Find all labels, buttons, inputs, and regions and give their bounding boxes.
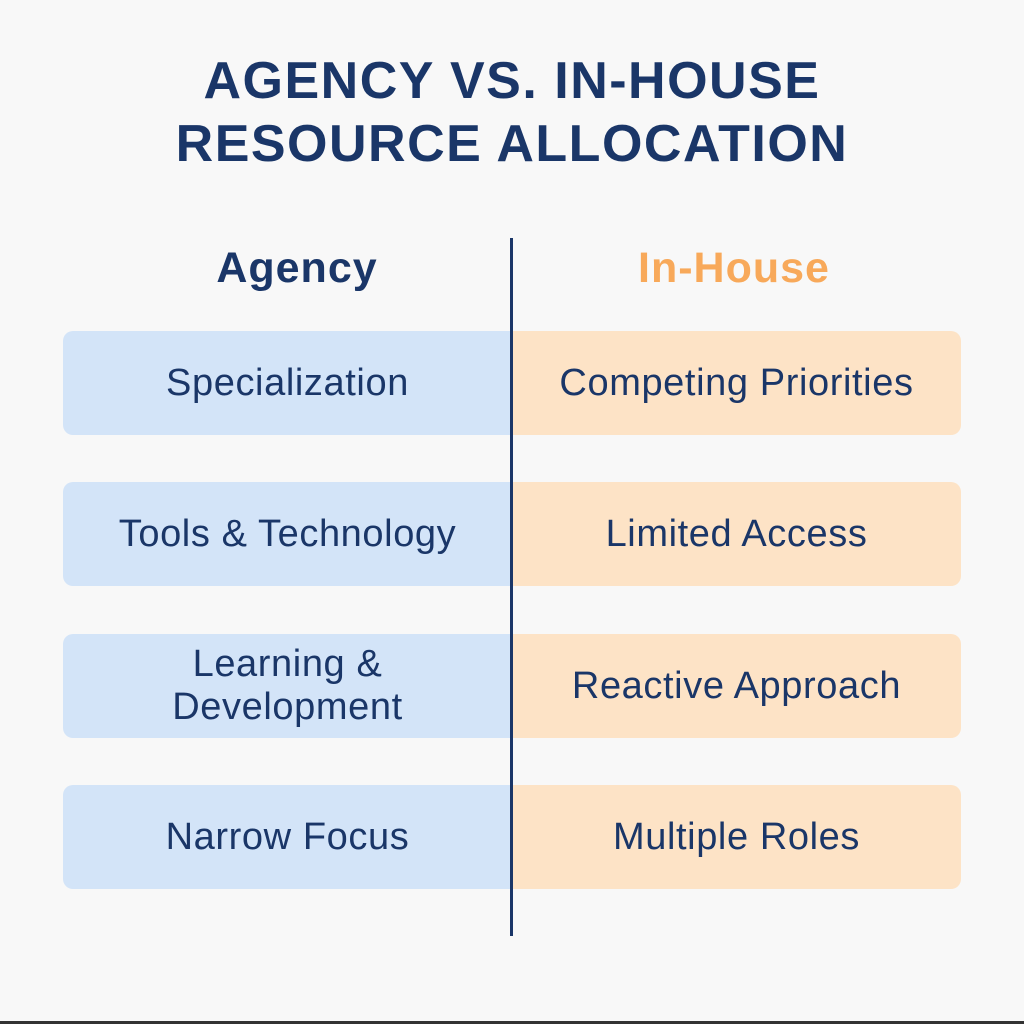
- in-house item 1: [512, 331, 961, 435]
- agency item 4: [63, 785, 512, 889]
- title: AGENCY VS. IN-HOUSE: [204, 52, 820, 110]
- in-house item 4: [512, 785, 961, 889]
- title: RESOURCE ALLOCATION: [176, 115, 848, 173]
- agency item 2: [63, 482, 512, 586]
- title: [176, 52, 848, 173]
- in-house item 2: Limited Access: [606, 512, 867, 554]
- in-house item 3: Reactive Approach: [572, 664, 901, 706]
- agency item 2: Tools & Technology: [119, 512, 456, 554]
- agency item 3: Learning &: [193, 643, 382, 685]
- center divider: [510, 238, 513, 936]
- agency item 1: [63, 331, 512, 435]
- agency item 3: [63, 634, 512, 738]
- in-house item 4: Multiple Roles: [613, 816, 860, 858]
- heading: in-house: In-House: [638, 244, 830, 292]
- in-house item 1: Competing Priorities: [559, 362, 914, 404]
- agency item 4: Narrow Focus: [166, 816, 409, 858]
- heading: agency: Agency: [216, 244, 378, 292]
- agency item 1: Specialization: [166, 362, 409, 404]
- in-house item 3: [512, 634, 961, 738]
- in-house item 2: [512, 482, 961, 586]
- agency item 3: Development: [172, 686, 403, 728]
